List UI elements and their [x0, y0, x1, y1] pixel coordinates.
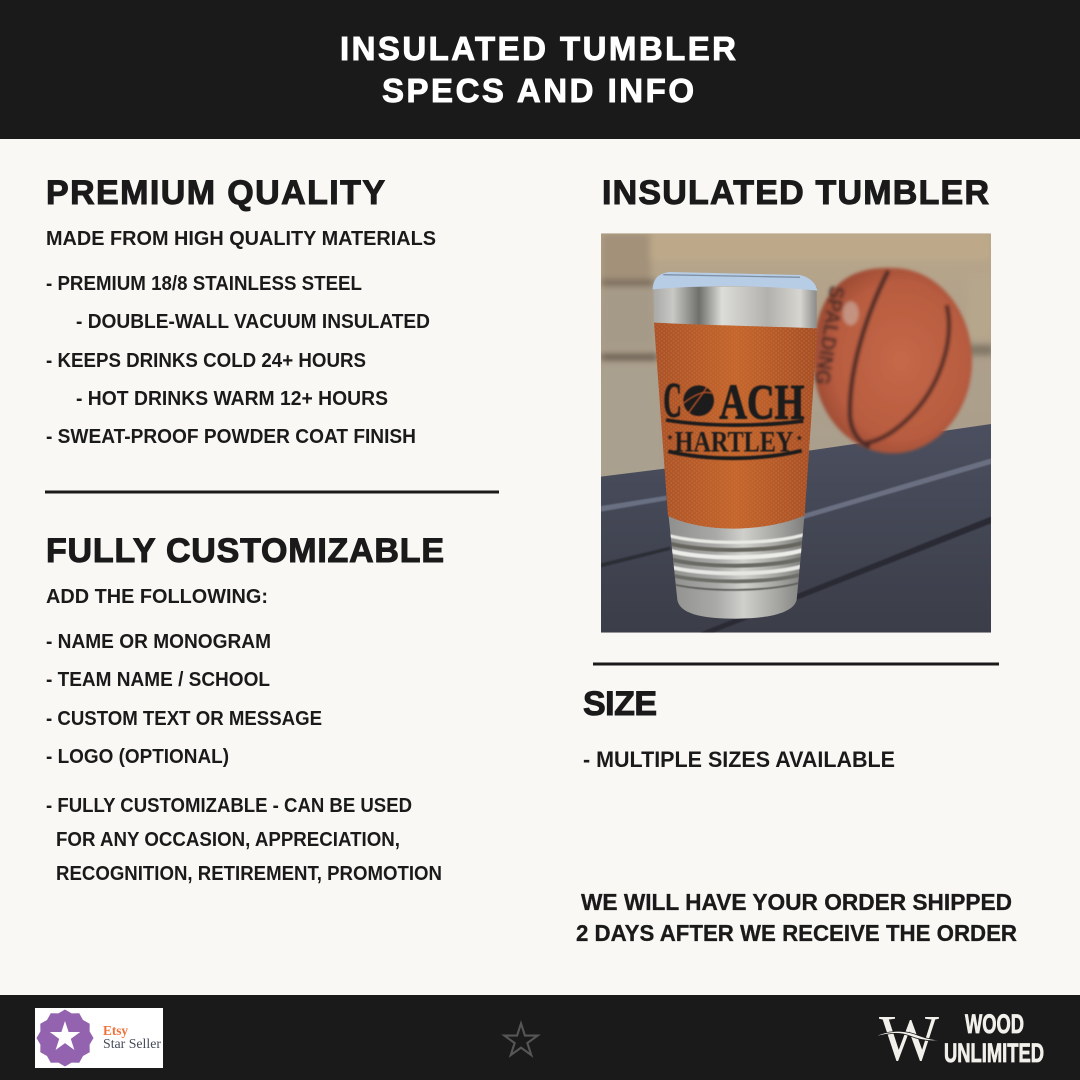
text block: occasions: FOR ANY OCCASION, APPRECIATION,	[56, 829, 400, 851]
header band	[0, 0, 1080, 139]
logo: wood unlimited	[878, 1002, 1044, 1075]
heading: premium quality: PREMIUM QUALITY	[46, 174, 385, 212]
title: SPECS AND INFO	[382, 72, 694, 109]
product photo: tumbler and basketball	[601, 233, 993, 633]
heading: fully customizable: FULLY CUSTOMIZABLE	[46, 532, 444, 570]
text block: occasions	[46, 795, 442, 885]
feature list: premium quality	[46, 228, 436, 448]
size note: - MULTIPLE SIZES AVAILABLE	[583, 747, 895, 772]
engraving: coach hartley	[663, 372, 804, 458]
icon: center star outline	[504, 1024, 538, 1055]
engraving: coach hartley: C	[663, 372, 682, 428]
heading: size: SIZE	[583, 685, 657, 723]
shipping note	[576, 889, 1017, 946]
feature list: premium quality: - DOUBLE-WALL VACUUM INSULATED	[76, 311, 430, 333]
badge: etsy star seller	[35, 1008, 163, 1068]
panel: premium quality	[46, 174, 436, 448]
shipping note: 2 DAYS AFTER WE RECEIVE THE ORDER	[576, 920, 1017, 946]
text block: occasions: - FULLY CUSTOMIZABLE - CAN BE USED	[46, 795, 412, 817]
feature list: premium quality: - PREMIUM 18/8 STAINLESS STEEL	[46, 273, 362, 295]
badge: etsy star seller: Etsy	[103, 1024, 128, 1039]
footer band	[0, 995, 1080, 1080]
basketball	[810, 268, 972, 453]
leather sleeve	[654, 323, 817, 529]
feature list: customization options: - TEAM NAME / SCHOOL	[46, 669, 270, 691]
logo: wood unlimited: W	[879, 1002, 940, 1075]
feature list: customization options: - CUSTOM TEXT OR MESSAGE	[46, 708, 322, 730]
title: INSULATED TUMBLER	[340, 30, 736, 67]
title	[340, 30, 736, 109]
feature list: premium quality: - HOT DRINKS WARM 12+ HOURS	[76, 388, 388, 410]
panel: size	[583, 685, 895, 772]
steel collar	[653, 287, 817, 328]
text block: occasions: RECOGNITION, RETIREMENT, PROMOTION	[56, 863, 442, 885]
basketball: SPALDING	[810, 284, 848, 387]
heading: insulated tumbler: INSULATED TUMBLER	[602, 174, 989, 212]
feature list: customization options	[46, 586, 322, 768]
logo: wood unlimited: WOOD	[965, 1009, 1024, 1039]
badge: etsy star seller: Star Seller	[103, 1037, 161, 1052]
lid	[653, 272, 817, 291]
feature list: premium quality: MADE FROM HIGH QUALITY MATERIALS	[46, 228, 436, 250]
icon: purple star badge	[36, 1010, 94, 1066]
feature list: customization options: ADD THE FOLLOWING:	[46, 586, 268, 608]
shipping note: WE WILL HAVE YOUR ORDER SHIPPED	[581, 889, 1012, 915]
base ridges	[667, 534, 807, 590]
feature list: customization options: - NAME OR MONOGRAM	[46, 631, 271, 653]
table	[601, 424, 991, 633]
brick wall background	[601, 233, 993, 487]
panel: fully customizable	[46, 532, 444, 885]
engraving: coach hartley: ACH	[719, 374, 804, 430]
tumbler	[653, 272, 817, 619]
feature list: premium quality: - KEEPS DRINKS COLD 24+ HOURS	[46, 350, 366, 372]
engraving: coach hartley: HARTLEY	[675, 426, 793, 458]
tumbler base	[668, 513, 805, 619]
feature list: customization options: - LOGO (OPTIONAL)	[46, 746, 229, 768]
feature list: premium quality: - SWEAT-PROOF POWDER COAT FINISH	[46, 426, 416, 448]
